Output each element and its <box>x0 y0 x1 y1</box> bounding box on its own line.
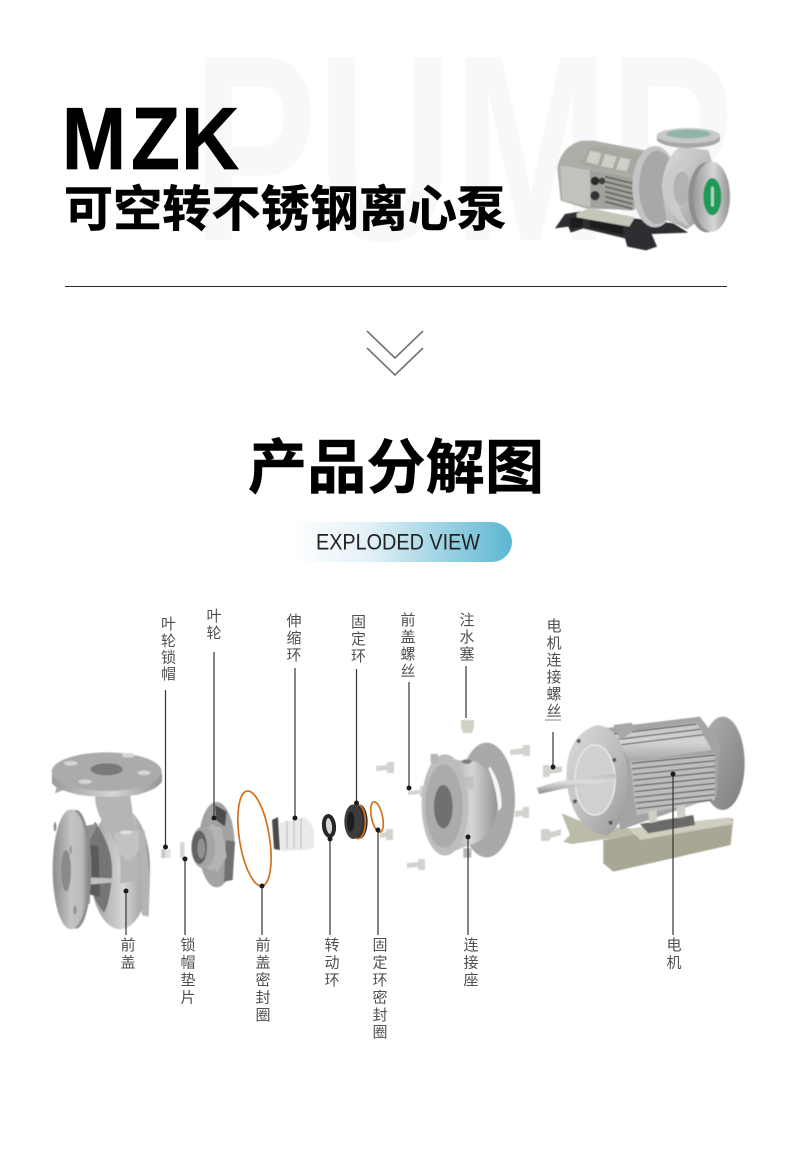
part: 电机 motor <box>537 717 745 872</box>
callout: 电机 <box>664 772 682 972</box>
callout: 转动环: 转动环 <box>322 937 340 989</box>
badge: EXPLODED VIEW <box>290 522 512 562</box>
part: bolts <box>376 720 530 870</box>
part: 前盖 casing <box>52 752 162 929</box>
subtitle: 可空转不锈钢离心泵 <box>64 183 506 237</box>
callout: 锁帽垫片 <box>178 856 196 1007</box>
callout: 前盖螺丝: 前盖螺丝 <box>398 612 416 680</box>
title: MZK: Z <box>131 89 180 188</box>
callout: 前盖螺丝 <box>398 612 416 790</box>
callout: 固定环 <box>349 614 366 806</box>
product photo: MZK pump <box>555 128 730 250</box>
part: 连接座 connector seat <box>422 743 515 858</box>
callout: 固定环密封圈: 固定环密封圈 <box>370 937 388 1041</box>
part: 固定环密封圈 orange ring <box>368 801 386 833</box>
callout: 伸缩环 <box>284 613 302 820</box>
part: 固定环 fixed ring <box>344 804 368 839</box>
callout: 连接座 <box>462 834 478 989</box>
callout: 叶轮 <box>204 608 222 820</box>
part: 叶轮 impeller <box>191 802 235 887</box>
callout: 固定环: 固定环 <box>349 614 366 665</box>
callout: 前盖密封圈: 前盖密封圈 <box>254 937 270 1024</box>
callout: 叶轮锁帽: 叶轮锁帽 <box>159 616 176 682</box>
title: MZK: K <box>181 89 239 188</box>
callout: 电机: 电机 <box>664 937 682 972</box>
callout: 固定环密封圈 <box>370 828 388 1041</box>
callout: 连接座: 连接座 <box>462 937 478 989</box>
callout: 前盖: 前盖 <box>118 937 136 972</box>
callout: 电机连接螺丝: 电机连接螺丝 <box>544 618 562 720</box>
callout: 注水塞 <box>458 612 474 718</box>
icon: double chevron <box>367 331 423 375</box>
badge: EXPLODED VIEW: EXPLODED VIEW <box>316 530 480 554</box>
part: 伸缩环 bellows <box>272 817 314 851</box>
heading: 产品分解图: 产品分解图 <box>248 435 544 501</box>
callout: 伸缩环: 伸缩环 <box>284 613 302 664</box>
callout: 叶轮: 叶轮 <box>204 608 222 641</box>
part: 转动环 rotating ring <box>323 816 335 836</box>
callout: 电机连接螺丝 <box>544 618 562 770</box>
callout: 锁帽垫片: 锁帽垫片 <box>178 937 196 1007</box>
header divider <box>65 286 727 287</box>
title: MZK <box>62 89 239 188</box>
title: MZK: M <box>62 89 126 188</box>
callout: 叶轮锁帽 <box>159 616 176 850</box>
part: 锁帽 small pieces <box>161 842 184 859</box>
part: 前盖密封圈 orange seal <box>232 789 277 888</box>
callout: 转动环 <box>322 836 340 989</box>
callout: 前盖密封圈 <box>254 884 270 1024</box>
callout: 注水塞: 注水塞 <box>458 612 474 663</box>
motor bolts <box>541 765 562 841</box>
callout: 前盖 <box>118 888 136 972</box>
